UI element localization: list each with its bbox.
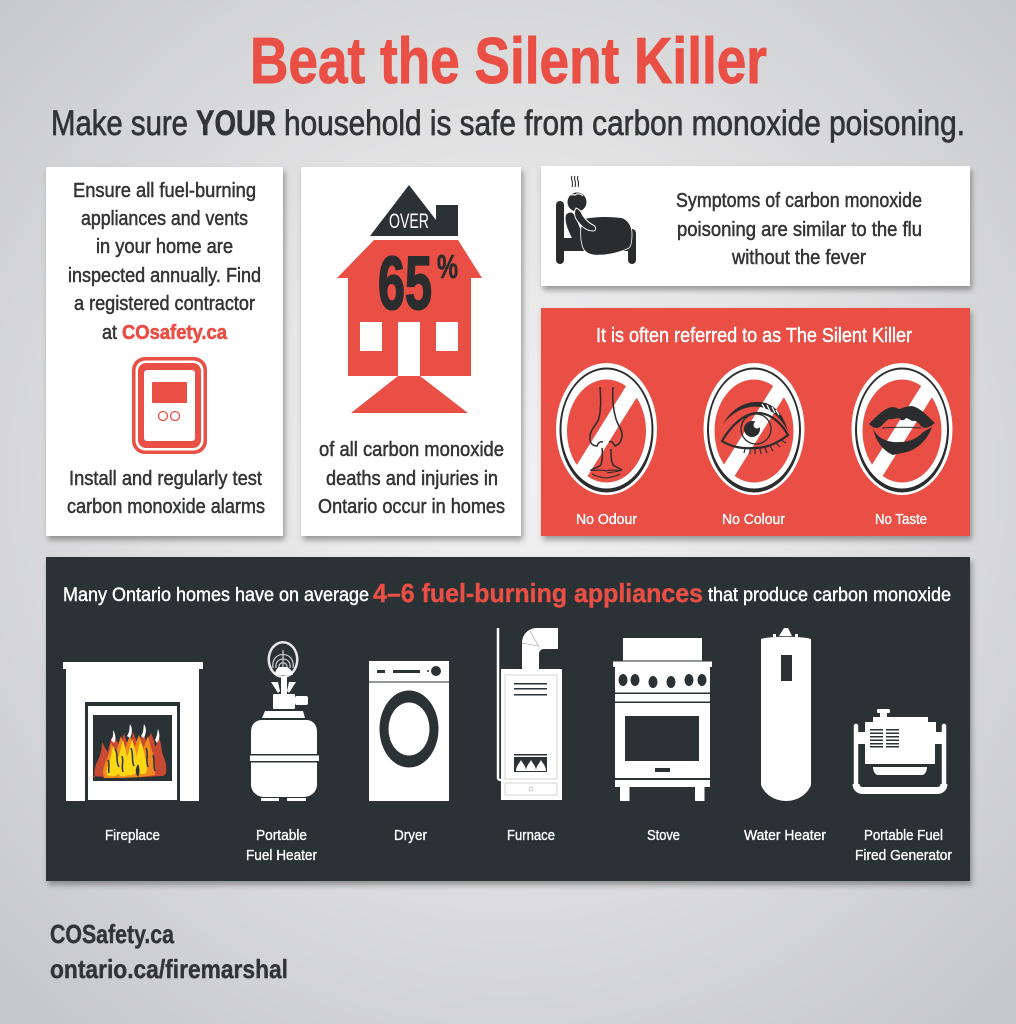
text: test alarms: Install and regularly test xyxy=(69,468,262,490)
labels: appliances: Stove xyxy=(647,828,680,844)
text: deaths and injuries: of all carbon monoxide xyxy=(319,439,504,461)
labels: appliances: Fired Generator xyxy=(855,848,952,864)
labels: senses: No Taste xyxy=(875,512,927,528)
labels: appliances: Portable xyxy=(256,828,307,844)
icon: house with statistic: % xyxy=(437,248,458,285)
title: Beat the Silent Killer xyxy=(250,24,767,97)
house body xyxy=(337,240,482,376)
labels: senses: No Odour xyxy=(576,512,637,528)
over label: OVER xyxy=(389,210,429,233)
labels: appliances: Fuel Heater xyxy=(246,848,317,864)
heading: appliances: Many Ontario homes have on average xyxy=(63,584,369,606)
text: inspect appliances: a registered contractor xyxy=(74,293,255,315)
text: symptoms xyxy=(676,190,922,269)
labels: appliances: Fireplace xyxy=(105,828,160,844)
icon: no colour xyxy=(704,363,804,495)
subtitle: Make sure xyxy=(51,104,188,143)
icon: no odour xyxy=(556,363,657,495)
text: test alarms: carbon monoxide alarms xyxy=(67,496,265,518)
65 percent: 65 xyxy=(378,241,432,325)
text: inspect appliances: at xyxy=(102,322,117,344)
labels: appliances: Furnace xyxy=(507,828,555,844)
text: symptoms: Symptoms of carbon monoxide xyxy=(676,190,922,212)
text: symptoms: without the fever xyxy=(731,247,866,269)
text: inspect appliances: appliances and vents xyxy=(81,208,248,230)
icon: furnace xyxy=(498,628,562,800)
labels: appliances: Dryer xyxy=(394,828,427,844)
icon: no taste xyxy=(852,363,952,495)
heading: appliances xyxy=(63,578,951,608)
labels: appliances xyxy=(105,828,952,864)
heading: appliances: that produce carbon monoxide xyxy=(708,584,951,606)
icon: water heater xyxy=(761,628,811,801)
text: inspect appliances: inspected annually. Find xyxy=(68,265,261,287)
house roof xyxy=(370,185,458,236)
subtitle: YOUR xyxy=(196,104,276,143)
icon: carbon monoxide alarm xyxy=(132,357,207,454)
text: inspect appliances xyxy=(68,180,261,344)
icon: sick person in bed xyxy=(556,176,636,264)
text: deaths and injuries xyxy=(318,439,505,518)
text: symptoms: poisoning are similar to the flu xyxy=(677,219,922,241)
heading: appliances: 4–6 fuel-burning appliances xyxy=(373,578,703,608)
icon: fireplace xyxy=(63,662,203,801)
text: test alarms xyxy=(67,468,265,518)
footer: websites: ontario.ca/firemarshal xyxy=(50,954,288,984)
panel: 65 percent statistic xyxy=(301,167,521,536)
icon: dryer xyxy=(369,661,449,801)
panel: the silent killer xyxy=(541,308,970,536)
text: deaths and injuries: deaths and injuries in xyxy=(326,468,498,490)
text: inspect appliances: in your home are xyxy=(96,236,233,258)
icon: portable fuel fired generator xyxy=(856,709,944,790)
text: deaths and injuries: Ontario occur in homes xyxy=(318,496,505,518)
footer: websites xyxy=(50,919,288,984)
panel: symptoms xyxy=(541,166,970,286)
icon: portable fuel heater xyxy=(250,641,319,801)
text: inspect appliances: Ensure all fuel-burning xyxy=(73,180,256,202)
footer: websites: COSafety.ca xyxy=(50,919,174,949)
icon: stove xyxy=(613,638,712,801)
labels: senses: No Colour xyxy=(722,512,785,528)
panel: fuel-burning appliances xyxy=(46,557,970,881)
labels: appliances: Portable Fuel xyxy=(864,828,943,844)
labels: appliances: Water Heater xyxy=(744,828,826,844)
heading: silent killer: It is often referred to as The Silent Killer xyxy=(596,325,912,347)
labels: senses xyxy=(576,512,927,528)
text: inspect appliances: COsafety.ca xyxy=(122,322,228,344)
icon: house with statistic xyxy=(337,185,482,413)
panel: inspection and alarms xyxy=(46,167,283,536)
